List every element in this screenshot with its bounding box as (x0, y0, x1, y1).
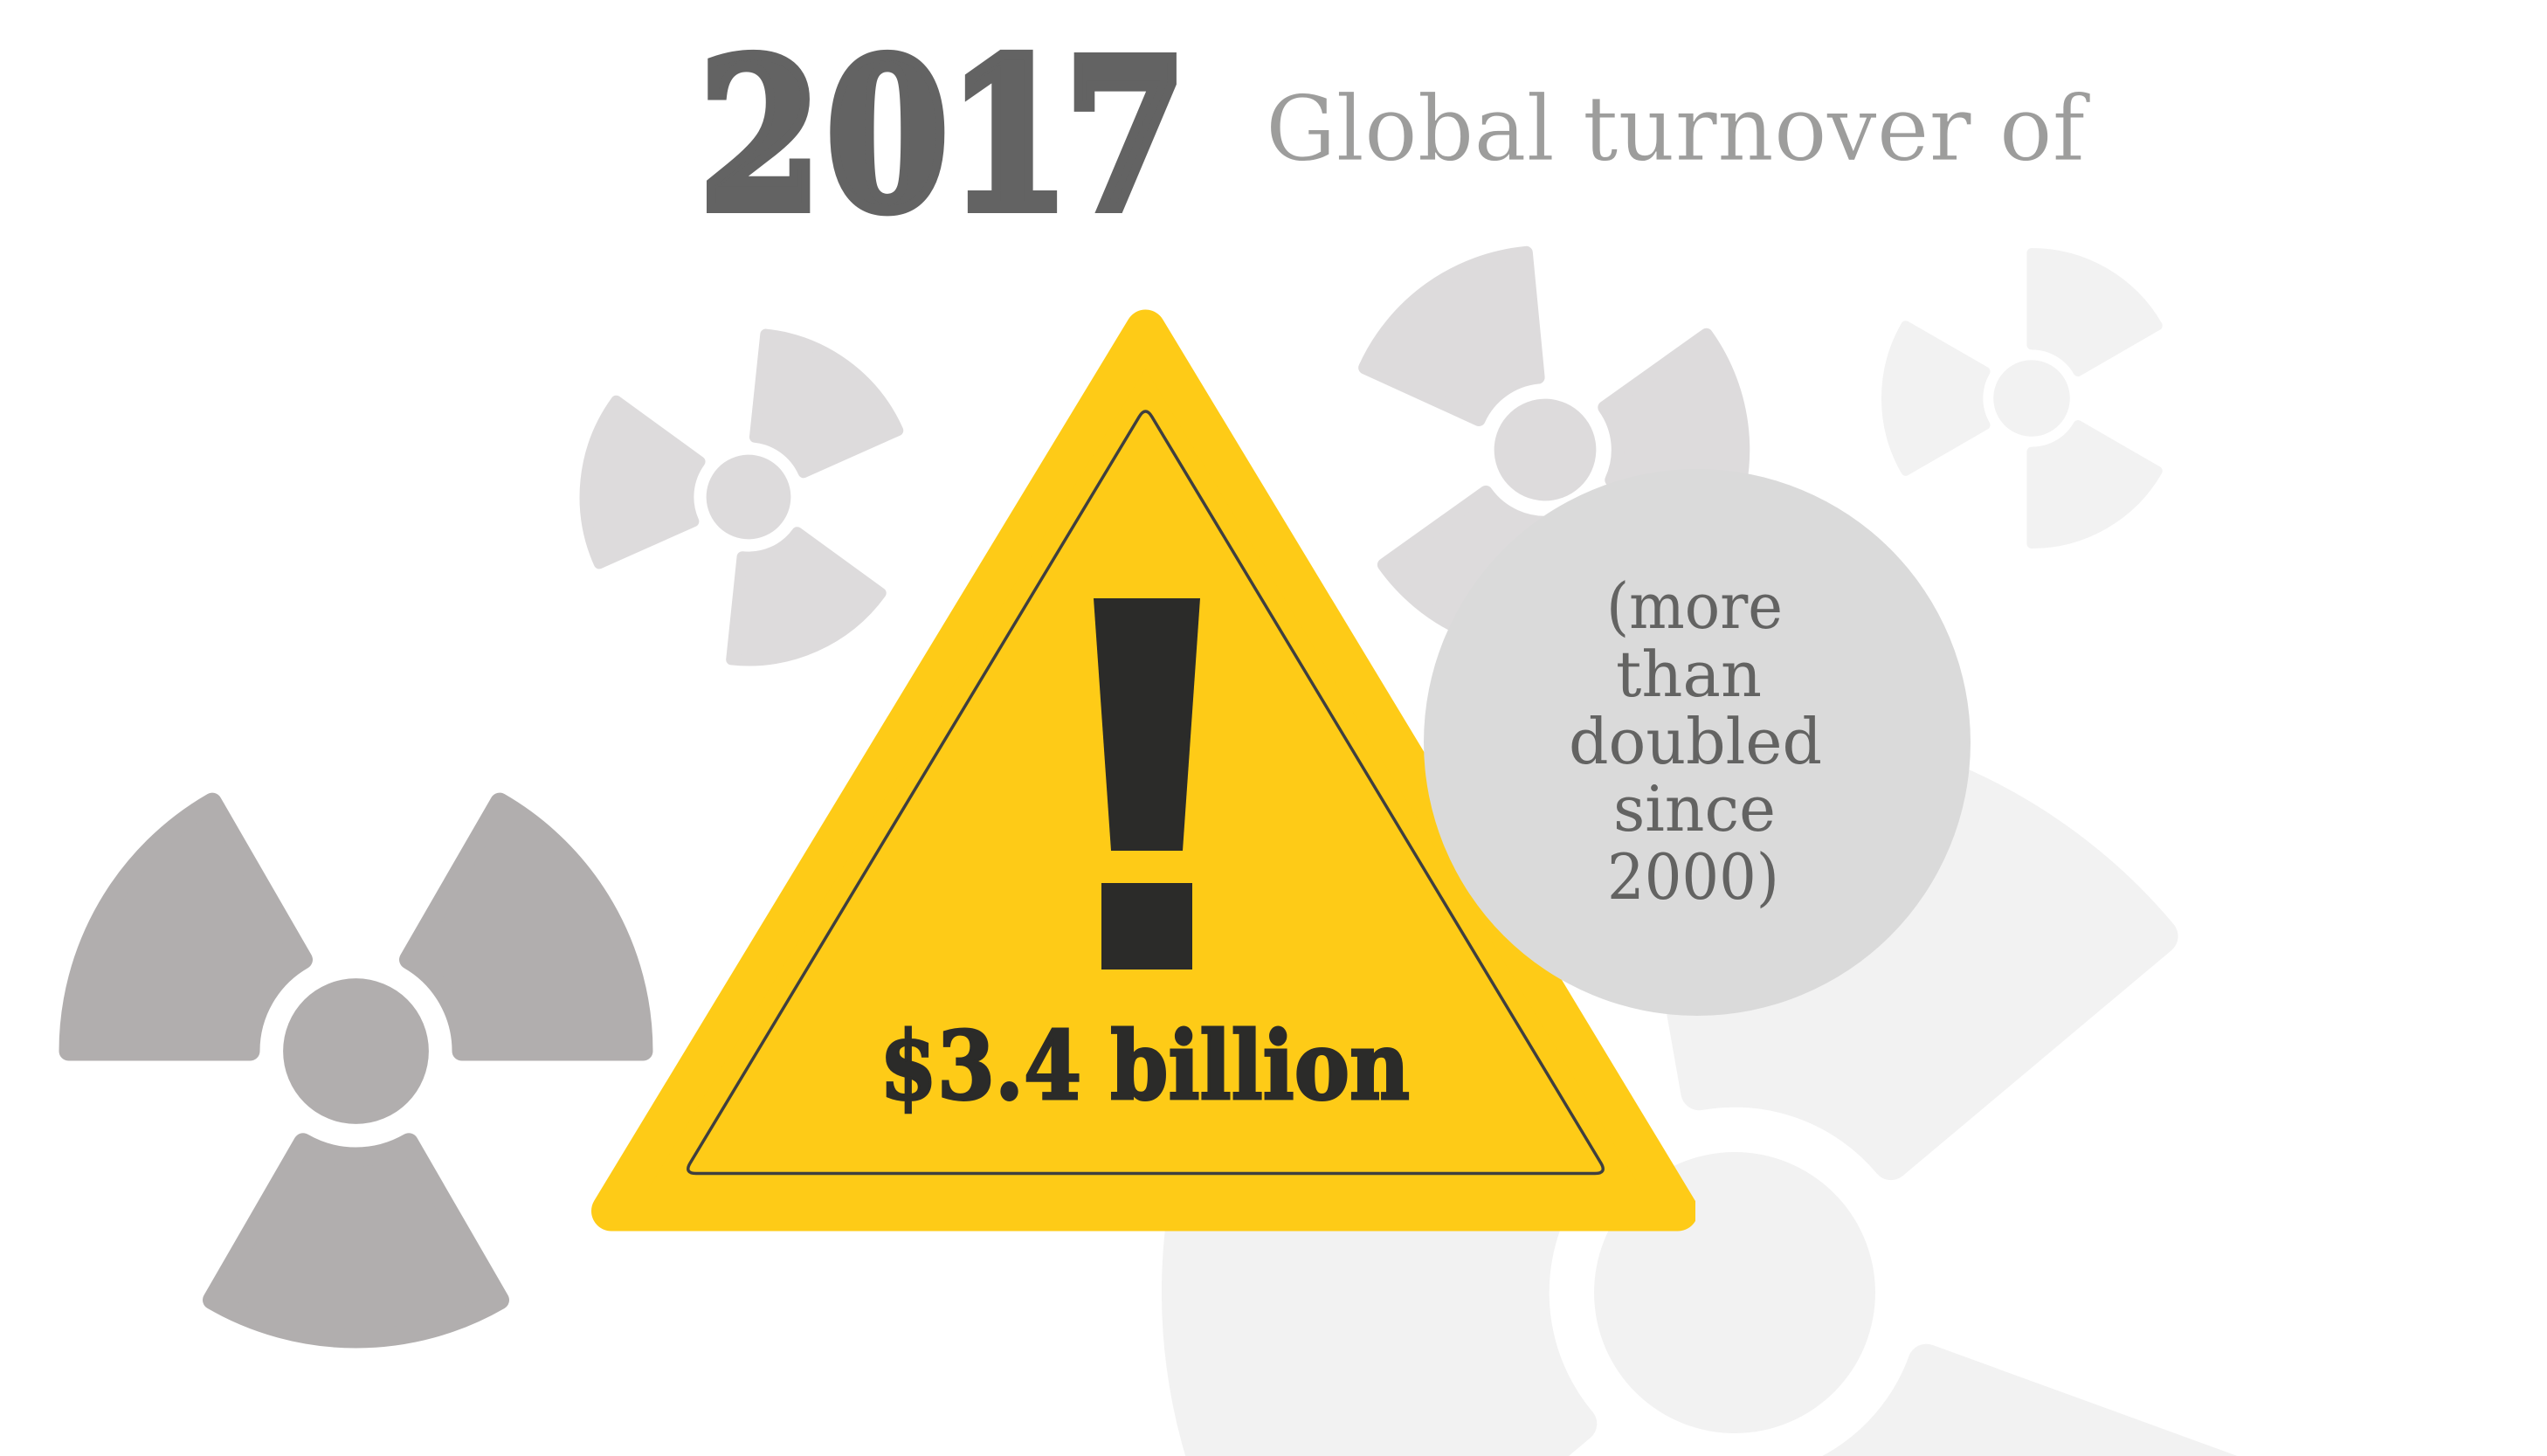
grey circle (1424, 469, 1971, 1016)
callout text (1569, 569, 1822, 914)
callout text: (more (1606, 569, 1783, 643)
figure: $3.4 billion: $3.4 billion (880, 1011, 1410, 1121)
callout circle: more than doubled since 2000 (1424, 469, 1971, 1016)
callout text: since (1613, 772, 1776, 845)
callout text: than (1616, 638, 1762, 711)
icon: large faint radiation symbol, bottom right (1162, 480, 2364, 1456)
icon: light grey radiation symbol, top centre (1259, 211, 1841, 786)
yellow triangle (611, 330, 1678, 1211)
icon: light grey radiation symbol, top left (542, 285, 1022, 757)
exclamation mark (1094, 598, 1200, 970)
callout text: 2000) (1607, 840, 1779, 914)
warning triangle panel (611, 330, 1678, 1211)
heading: global turnover of: Global turnover of (1266, 77, 2091, 182)
inner triangle outline (688, 411, 1603, 1174)
callout text: doubled (1569, 705, 1822, 778)
icon: dark grey radiation symbol, left (68, 803, 715, 1425)
icon: faint radiation symbol, top right (1843, 198, 2283, 635)
title: year 2017: 2017 (700, 14, 1186, 257)
